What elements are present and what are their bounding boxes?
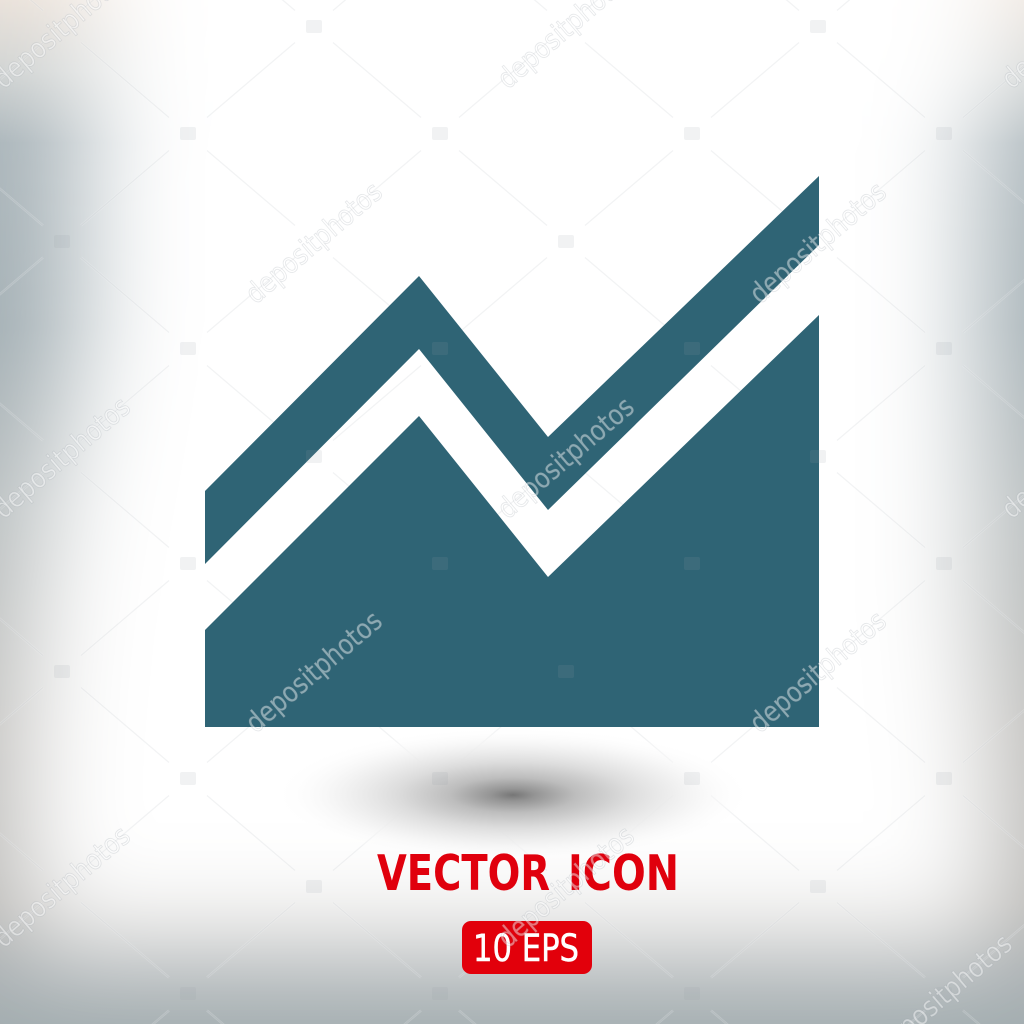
lower filled area — [205, 315, 819, 727]
icon: area chart — [205, 176, 819, 727]
watermark text: depositphotos — [743, 604, 893, 739]
watermark text: depositphotos — [491, 390, 641, 525]
ground shadow under the icon — [273, 727, 753, 863]
heading: vector icon: VECTOR — [377, 845, 550, 902]
upper zigzag trend band — [205, 176, 819, 564]
watermark text: depositphotos — [743, 175, 893, 310]
badge: 10 EPS: 10 EPS — [473, 927, 579, 970]
watermark text: depositphotos — [239, 175, 389, 310]
watermark text: depositphotos — [491, 819, 641, 954]
watermark text: depositphotos — [239, 604, 389, 739]
heading: vector icon: ICON — [568, 845, 679, 902]
